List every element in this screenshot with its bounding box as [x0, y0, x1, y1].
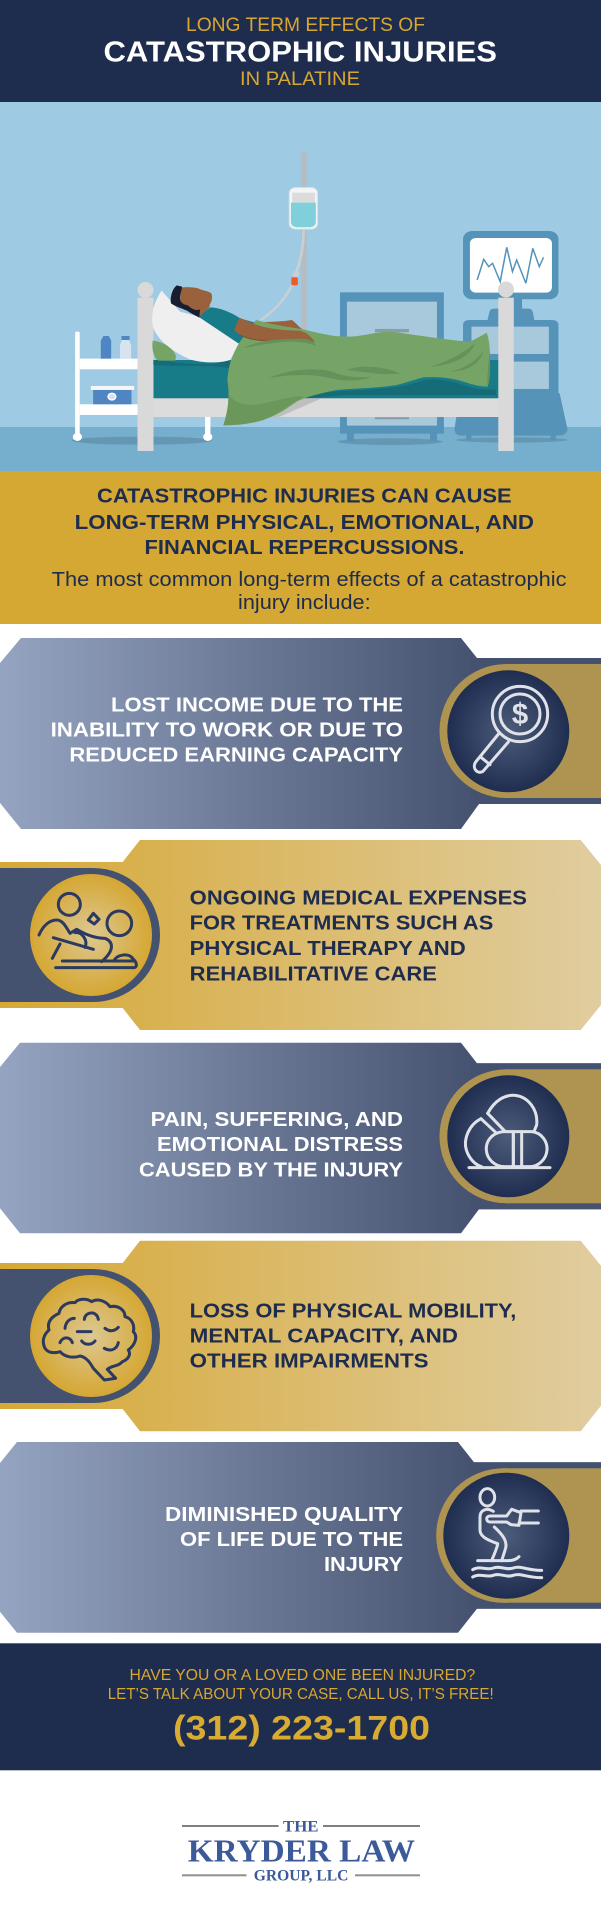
icon: patient and green blanket: [152, 285, 496, 425]
text: loss of mobility: [190, 1299, 516, 1372]
icon: physical therapy: [39, 893, 136, 968]
icon: brain: [43, 1299, 136, 1380]
intro text: injury include:: [238, 592, 371, 614]
text: diminished quality of life: OF LIFE DUE TO THE: [180, 1528, 403, 1551]
text: lost income: INABILITY TO WORK OR DUE TO: [51, 719, 403, 742]
icon: hospital bed frame: [138, 282, 514, 451]
icon: pills: [465, 1095, 550, 1168]
text: medical expenses: FOR TREATMENTS SUCH AS: [190, 912, 493, 935]
title banner: LONG TERM EFFECTS OF: [186, 14, 425, 36]
text: medical expenses: [190, 887, 527, 986]
icon: magnifying glass with dollar: [474, 686, 548, 772]
text: loss of mobility: OTHER IMPAIRMENTS: [190, 1349, 428, 1372]
intro heading: LONG-TERM PHYSICAL, EMOTIONAL, AND: [75, 511, 534, 534]
text: medical expenses: REHABILITATIVE CARE: [190, 963, 437, 986]
panel: pain and suffering: [0, 1043, 601, 1233]
text: pain and suffering: PAIN, SUFFERING, AND: [151, 1108, 403, 1131]
text: pain and suffering: EMOTIONAL DISTRESS: [157, 1133, 403, 1156]
panel: loss of mobility: [0, 1241, 601, 1431]
text: medical expenses: PHYSICAL THERAPY AND: [190, 937, 466, 960]
icon: magnifying glass with dollar: $: [512, 698, 528, 731]
logo: The Kryder Law Group: KRYDER LAW: [188, 1832, 415, 1868]
text: diminished quality of life: DIMINISHED QUALITY: [165, 1503, 403, 1526]
icon: white supply cart with bottles: [72, 332, 212, 445]
icon: bedside cabinet and heart monitor: [338, 231, 567, 445]
footer call to action: LET’S TALK ABOUT YOUR CASE, CALL US, IT’S FREE!: [108, 1686, 494, 1703]
text: diminished quality of life: [165, 1503, 403, 1576]
intro heading: FINANCIAL REPERCUSSIONS.: [144, 536, 464, 559]
title banner: CATASTROPHIC INJURIES: [104, 37, 497, 69]
text: pain and suffering: CAUSED BY THE INJURY: [139, 1159, 403, 1182]
text: lost income: REDUCED EARNING CAPACITY: [69, 744, 403, 767]
logo: The Kryder Law Group: GROUP, LLC: [254, 1868, 348, 1885]
icon: IV stand and bag: [261, 152, 317, 330]
logo: The Kryder Law Group: THE: [283, 1818, 318, 1835]
footer call to action: HAVE YOU OR A LOVED ONE BEEN INJURED?: [130, 1667, 476, 1684]
hero illustration: patient in hospital bed: [0, 102, 601, 471]
panel: diminished quality of life: [0, 1442, 601, 1633]
title banner: IN PALATINE: [240, 68, 360, 90]
intro panel: [0, 471, 601, 624]
footer call to action: [0, 1643, 601, 1770]
phone number: (312) 223-1700: [173, 1709, 430, 1747]
logo: The Kryder Law Group: [182, 1818, 420, 1885]
panel: medical expenses: [0, 840, 601, 1030]
intro heading: [75, 485, 534, 559]
panel: lost income: [0, 638, 601, 829]
intro text: [52, 569, 566, 614]
intro heading: CATASTROPHIC INJURIES CAN CAUSE: [97, 485, 512, 508]
text: diminished quality of life: INJURY: [324, 1553, 403, 1576]
text: lost income: LOST INCOME DUE TO THE: [111, 694, 403, 717]
text: medical expenses: ONGOING MEDICAL EXPENSES: [190, 887, 527, 910]
text: loss of mobility: LOSS OF PHYSICAL MOBILITY,: [190, 1299, 516, 1322]
text: pain and suffering: [139, 1108, 403, 1182]
intro text: The most common long-term effects of a catastrophic: [52, 569, 566, 591]
icon: water skier: [473, 1489, 542, 1578]
text: loss of mobility: MENTAL CAPACITY, AND: [190, 1324, 458, 1347]
text: lost income: [51, 694, 403, 767]
title banner: [0, 0, 601, 102]
